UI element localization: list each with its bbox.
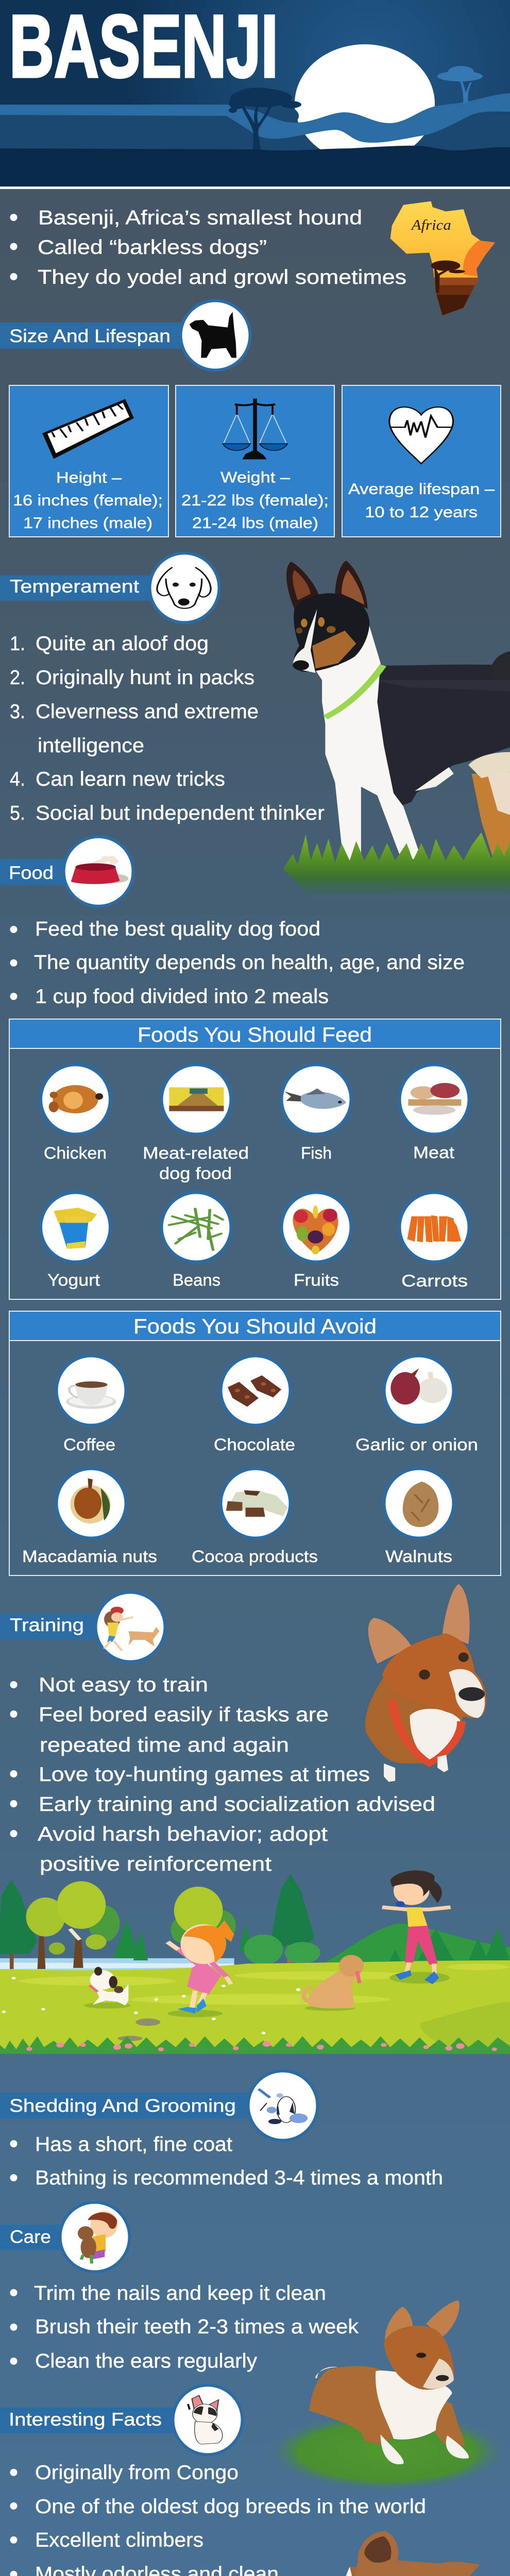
- heading: Training: [0, 1592, 165, 1662]
- bullet list: care: Clean the ears regularly: [35, 2350, 258, 2372]
- food: coffee: Coffee: [63, 1435, 115, 1454]
- bullet list: food: [10, 918, 465, 1008]
- girl with whistle: [382, 1907, 450, 1909]
- bullet list: training: repeated time and again: [40, 1734, 289, 1756]
- icon: child hugging teddy: [78, 2211, 118, 2264]
- bullet list: interesting facts: Originally from Congo: [35, 2462, 239, 2484]
- food: beans: [162, 1192, 231, 1289]
- numbered list: temperament: 3.: [10, 701, 25, 723]
- card: height: 16 inches (female);: [13, 492, 163, 509]
- bullet list: training: Avoid harsh behavior; adopt: [38, 1823, 328, 1845]
- food: chicken: [41, 1064, 110, 1162]
- icon: ruler: [42, 399, 134, 459]
- bullet list: interesting facts: [10, 2462, 426, 2576]
- icon: cartoon bulldog: [188, 2395, 223, 2444]
- illustration: kids and dogs in the park: [0, 1871, 510, 2054]
- icon: balance scale: [223, 399, 287, 459]
- food: chocolate: [214, 1356, 295, 1454]
- numbered list: temperament: Originally hunt in packs: [36, 667, 254, 689]
- heading: Care: Care: [10, 2227, 51, 2247]
- heading: Interesting Facts: [0, 2385, 242, 2454]
- icon: dog silhouette: [189, 312, 236, 358]
- food: garlic or onion: Garlic or onion: [355, 1435, 478, 1454]
- heading: Temperament: Temperament: [10, 577, 139, 597]
- round trees: [89, 1905, 120, 1942]
- conifers: [0, 1874, 315, 1954]
- heading: Size And Lifespan: [0, 301, 250, 370]
- heading: Food: [0, 837, 133, 906]
- small spotted dog: [93, 1984, 128, 2006]
- bullet list: food: 1 cup food divided into 2 meals: [35, 986, 329, 1008]
- food: meat-related dog food: dog food: [159, 1164, 232, 1183]
- food: meat-related dog food: Meat-related: [143, 1144, 249, 1162]
- bullet list: training: Early training and socialization advised: [39, 1793, 435, 1816]
- food: carrots: Carrots: [401, 1272, 468, 1290]
- food: fish: [281, 1064, 351, 1162]
- numbered list: temperament: 5.: [10, 802, 25, 824]
- numbered list: temperament: Can learn new tricks: [36, 768, 225, 790]
- bullet list: care: Brush their teeth 2-3 times a week: [35, 2316, 359, 2338]
- food: garlic or onion: [355, 1356, 478, 1454]
- bullet list: food: Feed the best quality dog food: [35, 918, 320, 940]
- panel: foods you should feed: Foods You Should Feed: [138, 1024, 372, 1046]
- card: lifespan: [342, 385, 501, 537]
- card: weight: 21-24 lbs (male): [192, 515, 318, 532]
- heading: Temperament: [0, 553, 219, 622]
- icon: child playing with dog: [104, 1607, 159, 1651]
- intro bullet list: [10, 207, 406, 289]
- grass: [283, 832, 510, 900]
- intro bullet list: They do yodel and growl sometimes: [38, 266, 406, 289]
- bullet list: shedding and grooming: Bathing is recommended 3-4 times a month: [35, 2167, 443, 2189]
- bullet list: interesting facts: One of the oldest dog breeds in the world: [35, 2496, 426, 2518]
- golden dog: [308, 1969, 358, 2008]
- bullet list: training: Love toy-hunting games at times: [39, 1764, 370, 1786]
- numbered list: temperament: Cleverness and extreme: [36, 701, 259, 723]
- food: cocoa products: [192, 1468, 318, 1566]
- image: brown basenji with red harness: [365, 1584, 486, 1782]
- numbered list: temperament: 2.: [10, 667, 25, 689]
- heading: Size And Lifespan: Size And Lifespan: [9, 326, 171, 346]
- heading: Interesting Facts: Interesting Facts: [9, 2410, 162, 2430]
- image: basenji looking down: [337, 2531, 501, 2576]
- food: meat: Meat: [413, 1143, 454, 1162]
- food: meat-related dog food: [143, 1064, 249, 1183]
- bullet list: interesting facts: Excellent climbers: [35, 2529, 203, 2551]
- icon: heartbeat: [389, 407, 453, 464]
- food: fruits: [281, 1192, 351, 1289]
- card: weight: [176, 385, 334, 537]
- tree left: [229, 88, 301, 149]
- bullet list: care: Trim the nails and keep it clean: [34, 2282, 326, 2304]
- numbered list: temperament: Quite an aloof dog: [36, 633, 209, 655]
- card: weight: 21-22 lbs (female);: [181, 492, 329, 509]
- food: carrots: [400, 1192, 469, 1290]
- food: yogurt: Yogurt: [47, 1270, 100, 1289]
- numbered list: temperament: 1.: [10, 633, 25, 655]
- bullet list: training: positive reinforcement: [40, 1853, 271, 1875]
- icon: Africa map: [387, 199, 498, 317]
- icon: dog face: [157, 567, 211, 608]
- food: fish: Fish: [301, 1144, 332, 1162]
- food: coffee: [57, 1356, 126, 1454]
- card: height: Height –: [56, 469, 122, 486]
- food: walnuts: [384, 1468, 453, 1566]
- bullet list: shedding and grooming: Has a short, fine coat: [35, 2133, 232, 2156]
- girl throwing: [187, 1960, 221, 1995]
- food: walnuts: Walnuts: [385, 1547, 452, 1566]
- icon: dog bowl with bone: [71, 856, 128, 884]
- bullet list: training: Feel bored easily if tasks are: [39, 1704, 329, 1726]
- card: height: [9, 385, 168, 537]
- food: beans: Beans: [173, 1270, 220, 1289]
- image: tricolour basenji standing on grass: [283, 561, 510, 900]
- heading: Food: Food: [9, 863, 54, 883]
- image: basenji lying on grass: [265, 2300, 509, 2492]
- card: lifespan: Average lifespan –: [348, 481, 495, 498]
- panel: foods you should avoid: [9, 1311, 501, 1575]
- card: weight: Weight –: [220, 469, 290, 486]
- heading: Training: Training: [10, 1615, 84, 1635]
- tree right: [437, 66, 483, 104]
- food: cocoa products: Cocoa products: [192, 1547, 318, 1566]
- heading: Shedding And Grooming: [0, 2071, 317, 2140]
- bullet list: training: Not easy to train: [39, 1674, 208, 1696]
- meadow: [0, 1960, 510, 2054]
- heading: Care: [0, 2202, 130, 2272]
- bullet list: shedding and grooming: [10, 2133, 443, 2189]
- numbered list: temperament: [10, 633, 325, 824]
- header banner: [0, 0, 510, 189]
- label: Africa: Africa: [411, 216, 451, 233]
- food: meat: [400, 1064, 469, 1162]
- icon: dog grooming: [259, 2089, 308, 2124]
- panel: foods you should avoid: Foods You Should Avoid: [133, 1315, 377, 1338]
- bullet list: food: The quantity depends on health, age, and size: [34, 952, 465, 974]
- intro bullet list: Basenji, Africa’s smallest hound: [38, 207, 362, 229]
- card: lifespan: 10 to 12 years: [365, 504, 478, 521]
- panel: foods you should feed: [9, 1019, 501, 1299]
- bullet list: training: [10, 1674, 435, 1875]
- bullet list: care: [10, 2282, 359, 2372]
- numbered list: temperament: intelligence: [38, 735, 144, 757]
- flower border: [0, 2036, 510, 2054]
- heading: Shedding And Grooming: Shedding And Grooming: [9, 2096, 236, 2116]
- food: yogurt: [41, 1192, 110, 1289]
- food: macadamia nuts: Macadamia nuts: [22, 1547, 157, 1566]
- food: chicken: Chicken: [44, 1144, 107, 1162]
- numbered list: temperament: 4.: [10, 768, 25, 790]
- card: height: 17 inches (male): [23, 515, 152, 532]
- food: macadamia nuts: [22, 1468, 157, 1566]
- food: fruits: Fruits: [294, 1270, 339, 1289]
- numbered list: temperament: Social but independent thinker: [36, 802, 325, 824]
- food: chocolate: Chocolate: [214, 1435, 295, 1454]
- intro bullet list: Called “barkless dogs”: [38, 236, 267, 259]
